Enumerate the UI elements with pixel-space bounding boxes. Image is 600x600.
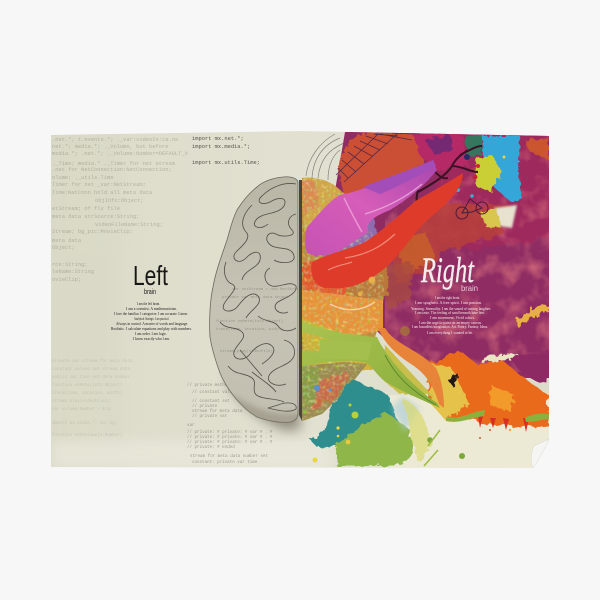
code text: top: Stream; bg_pic:MovieClip;: [52, 229, 133, 235]
code text: top: import mx.media.*;: [192, 144, 250, 150]
text block: right brain description: [411, 295, 491, 335]
heading: Left brain: [133, 260, 168, 296]
code text: bottom: // private: # private: # var # . #: [187, 440, 273, 445]
code text: bottom: constant: private var time: [192, 460, 258, 465]
heading: Left brain: Left: [133, 260, 168, 291]
code text: top: etStream; of flv file: [52, 206, 120, 212]
yellow lobe: [302, 178, 345, 232]
purple top ribbon: [363, 160, 436, 194]
heading: Right brain: brain: [461, 284, 478, 293]
orange lobe: [345, 267, 389, 298]
code text: top: Timer for net _var:NetStream;: [52, 182, 146, 188]
code text: top: ._Time; media.* ._Timer for net stream: [52, 161, 175, 167]
orange and red lobe: [302, 261, 348, 296]
sulci lines: [220, 184, 296, 411]
code text: bottom: // constant set: [192, 399, 230, 404]
mustard lobe: [302, 318, 374, 370]
code text: top: leName:String: [52, 269, 94, 275]
text block: right brain description: I am movement. Vivid colors.: [430, 315, 475, 320]
mix of paint spatters: [400, 154, 511, 439]
text block: right brain description: I am spaghetti. A free spirit. I am passion.: [415, 300, 482, 305]
icon: right brain hemisphere and paint: [299, 160, 549, 466]
code text: top: media.*; .net.*; ._Volume:Number=DEFAULT_V: [52, 151, 189, 157]
magenta base: [330, 132, 549, 378]
code text: top: Time:NetConn hold all meta data: [52, 190, 153, 196]
brain lobe speckle: [302, 178, 384, 421]
text block: left brain description: I am a scientist. A mathematician.: [126, 306, 177, 311]
code text: top: ovieClip;: [52, 277, 81, 283]
code text: top: meta data strSource:String;: [52, 214, 139, 220]
code lines over brain: stream.play(videoFile);: [220, 349, 275, 354]
red-orange top swath: [338, 132, 425, 198]
text block: right brain description: I am the urge to paint on an empty canvas.: [419, 320, 482, 325]
text block: right brain description: I am everything I wanted to be.: [427, 330, 473, 335]
cream card: [494, 205, 517, 228]
panel: left paper background: stream.play(videoFile);: [52, 399, 110, 404]
heading: Left brain: brain: [144, 287, 156, 296]
ink wire lines: [306, 134, 344, 180]
code text: bottom: // constant values for: [192, 390, 248, 395]
small green ribbons: [446, 410, 549, 422]
red ribbon: [311, 173, 463, 288]
code text: bottom: // private: # private: # var # . #: [187, 430, 273, 435]
text block: left brain description: [111, 301, 192, 341]
poster: [51, 130, 550, 470]
heading: Right brain: [420, 250, 478, 293]
panel: left paper background: [51, 130, 549, 470]
panel: left paper background: import mx.video.*; var bg;: [52, 421, 117, 426]
panel: left paper background: constant values net stream data: [52, 367, 130, 372]
code text: top: rce:String;: [52, 262, 88, 268]
panel: left paper background: function onMeta(info:Object): [52, 383, 122, 388]
panel: right paint background: [306, 132, 550, 470]
code text: top: import mx.net.*;: [192, 136, 244, 142]
heading: Right brain: Right: [420, 250, 475, 290]
code text: bottom: // private var: [192, 414, 228, 419]
text block: left brain description: Always in control. A master of words and language.: [116, 321, 188, 326]
code lines over brain: function onMeta(info:Object): [216, 319, 283, 324]
code text: top: .net for NetConnection:NetConnection;: [52, 167, 172, 173]
brain shadow: [226, 375, 300, 430]
code lines over brain: trace(time, duration, width): [216, 327, 283, 332]
text block: right brain description: I am taste. The feeling of sand beneath bare feet.: [415, 310, 485, 315]
panel: left paper background: private var stream for meta data: [52, 359, 133, 364]
code text: top: Object;: [52, 245, 75, 251]
code text: top: videoFileName:String;: [95, 222, 163, 228]
panel: left paper background: function setVolume(n:Number): [52, 433, 122, 438]
text block: left brain description: I am the left brain.: [137, 301, 160, 306]
text block: left brain description: I know exactly who I am.: [133, 336, 170, 341]
orange ribbon: [378, 328, 444, 408]
panel: left paper background: public var time set data number: [52, 375, 130, 380]
panel: left paper background: trace(time, duration, width): [52, 391, 122, 396]
code text: top: objInfo:Object;: [95, 198, 144, 204]
code lines over brain: var netStream = new NetStream: [232, 287, 302, 292]
paint droplets: [369, 277, 375, 283]
dark tree branches: [416, 145, 482, 201]
white lower paint ground: [390, 395, 550, 470]
pink ribbon: [305, 163, 437, 255]
text block: left brain description: I am order. I am logic.: [135, 331, 167, 336]
lilac lobe: [314, 218, 378, 257]
poster corner curl: [531, 439, 549, 468]
yellow spill: [402, 398, 432, 462]
code text: top: meta data: [52, 238, 82, 244]
code text: top: olume; ._utils.Time: [52, 175, 113, 181]
blue paint: [483, 136, 522, 203]
code text: top: net.*; media.*; ._Volume, but before: [52, 144, 168, 150]
code text: bottom: stream for meta data: [192, 409, 243, 414]
code text: top: import mx.utils.Time;: [192, 160, 260, 166]
teal paint: [322, 380, 400, 446]
code text: bottom: var: [187, 424, 195, 428]
code text: bottom: // private method: [187, 383, 230, 388]
code text: bottom: // private: [192, 404, 218, 409]
text block: left brain description: I love the familiar. I categorize. I am accurate. Linear.: [114, 311, 188, 316]
icon: left brain hemisphere: [210, 177, 302, 430]
text block: right brain description: I am the right brain.: [435, 295, 460, 300]
code text: bottom: // private: # ended: [187, 445, 235, 450]
text block: right brain description: Yearning. Sensuality. I am the sound of roaring laughter.: [411, 306, 491, 311]
yellow-green paint: [475, 155, 502, 192]
code lines over brain: private var meta data object: [222, 295, 289, 300]
green ribbon: [300, 320, 440, 408]
orange paint splash: [430, 352, 549, 428]
code text: top: [52, 136, 260, 283]
mottled red over magenta: [385, 135, 550, 375]
black splat: [448, 373, 458, 388]
text block: right brain description: I am boundless imagination. Art. Poetry. Fantasy. Ideas.: [412, 324, 488, 329]
ladder lines: [336, 133, 420, 182]
bicycle: [456, 199, 488, 219]
text block: left brain description: Analytical. Strategic. I am practical.: [134, 316, 169, 321]
code text: bottom: [187, 383, 273, 465]
code text: bottom: // private: # private: # var # . #: [187, 435, 273, 440]
text block: left brain description: Realistic. I calculate equations and play with numbers.: [111, 326, 192, 331]
code text: bottom: stream for meta data number set: [190, 454, 268, 459]
code lines over brain: [216, 287, 302, 354]
code text: top: .net.*; t.events.*; ._var:videoIn:ca.ns: [52, 137, 178, 143]
mottled orange-brown patch: [390, 205, 510, 285]
panel: left paper background: var volume:Number = 0.5;: [52, 407, 112, 412]
